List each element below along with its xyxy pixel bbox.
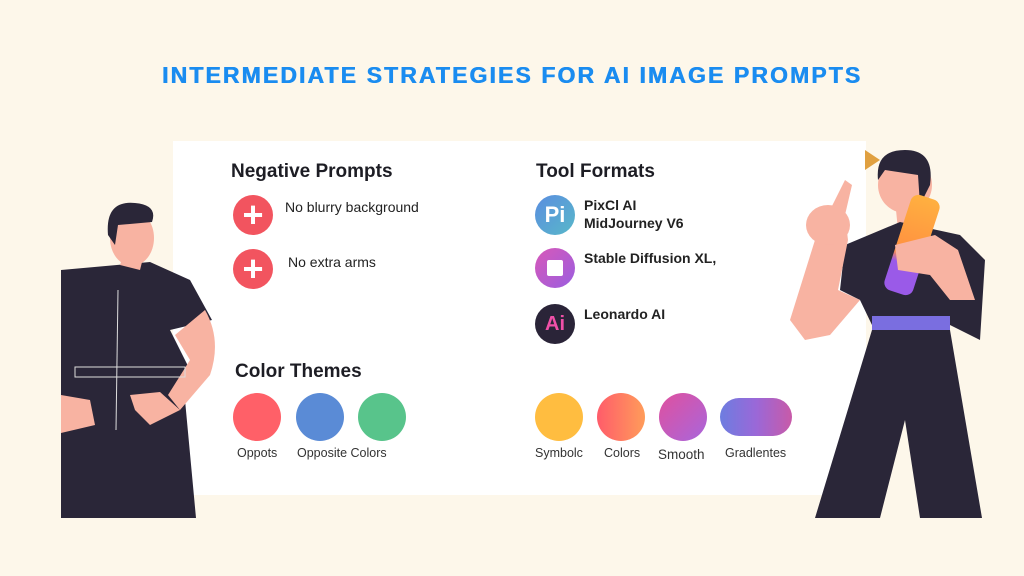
title: INTERMEDIATE STRATEGIES FOR AI IMAGE PROMPTS [162,62,862,88]
swatches right: Colors [604,446,640,460]
swatches right: Smooth [658,447,705,462]
text: stable diffusion: Stable Diffusion XL, [584,250,716,266]
illustration: right man [790,150,985,518]
icon: pixcl [535,195,575,235]
icon: leonardo [535,304,575,344]
text: pixcl midjourney [584,197,684,231]
text: no extra arms: No extra arms [288,254,376,270]
text: no blurry: No blurry background [285,199,419,215]
icon: plus 1 [233,195,273,235]
swatches right: Symbolc [535,446,583,460]
text: pixcl midjourney: MidJourney V6 [584,215,684,231]
panel: main card [173,141,866,495]
icon: pixcl: Pi [545,202,565,227]
icon: stable diffusion [535,248,575,288]
heading: color themes: Color Themes [235,361,362,382]
icon: plus 2: + [242,248,264,289]
swatches right [535,393,792,462]
swatches left: Oppots [237,446,277,460]
illustration: left man [61,202,215,518]
text: leonardo: Leonardo AI [584,306,665,322]
heading: negative prompts: Negative Prompts [231,161,393,182]
heading: tool formats: Tool Formats [536,161,655,182]
swatches right: Gradlentes [725,446,786,460]
text: pixcl midjourney: PixCl AI [584,197,636,213]
swatches left [233,393,406,460]
swatches left: Opposite Colors [297,446,387,460]
icon: plus 2 [233,249,273,289]
icon: plus 1: + [242,194,264,235]
icon: leonardo: Ai [545,313,565,335]
